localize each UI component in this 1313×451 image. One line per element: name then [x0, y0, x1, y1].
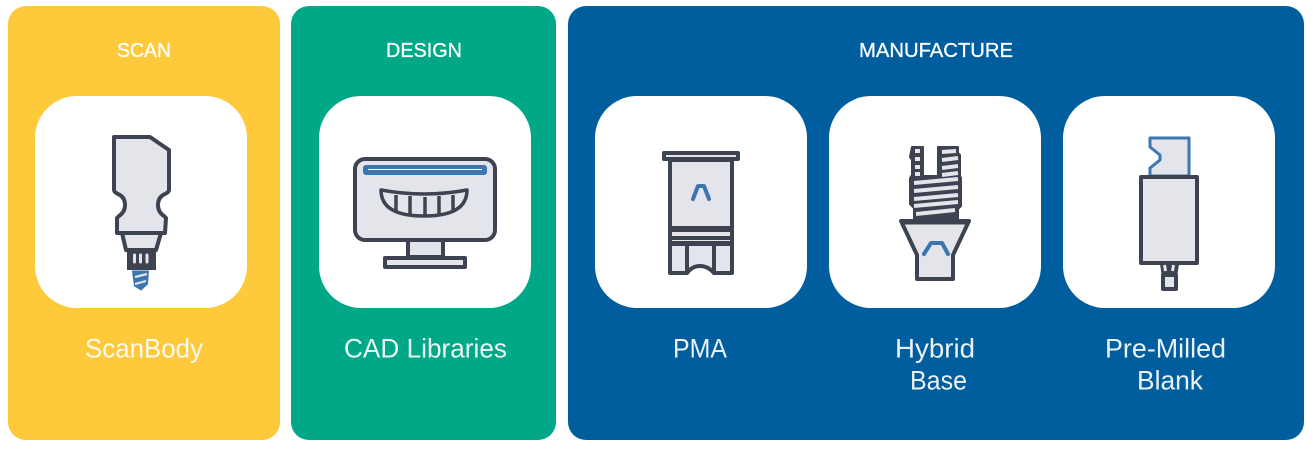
- tile: hybrid base: [829, 96, 1041, 308]
- label: hybrid base: Hybrid: [895, 334, 975, 364]
- icon: hybrid base: [901, 147, 969, 279]
- panel: scan: [8, 6, 280, 440]
- heading: manufacture: MANUFACTURE: [859, 40, 1013, 62]
- tile: pre-milled blank: [1063, 96, 1275, 308]
- label: scanbody: ScanBody: [85, 334, 203, 364]
- icon: monitor: [355, 159, 495, 267]
- icon: pma: [664, 153, 738, 273]
- panel: manufacture: [568, 6, 1304, 440]
- label: pma: PMA: [673, 334, 727, 364]
- tile: cad libraries: [319, 96, 531, 308]
- icon: pre-milled blank: [1141, 138, 1197, 289]
- label: pre-milled blank: Blank: [1137, 366, 1203, 396]
- label: pre-milled blank: [1105, 334, 1226, 396]
- heading: scan: SCAN: [117, 40, 171, 62]
- label: hybrid base: Base: [910, 366, 967, 396]
- heading: design: DESIGN: [386, 40, 462, 62]
- tile: scanbody: [35, 96, 247, 308]
- tile: pma: [595, 96, 807, 308]
- label: pre-milled blank: Pre-Milled: [1105, 334, 1226, 364]
- label: hybrid base: [895, 334, 975, 396]
- icon: scanbody: [114, 137, 169, 290]
- panel: design: [291, 6, 556, 440]
- label: cad libraries: CAD Libraries: [344, 334, 507, 364]
